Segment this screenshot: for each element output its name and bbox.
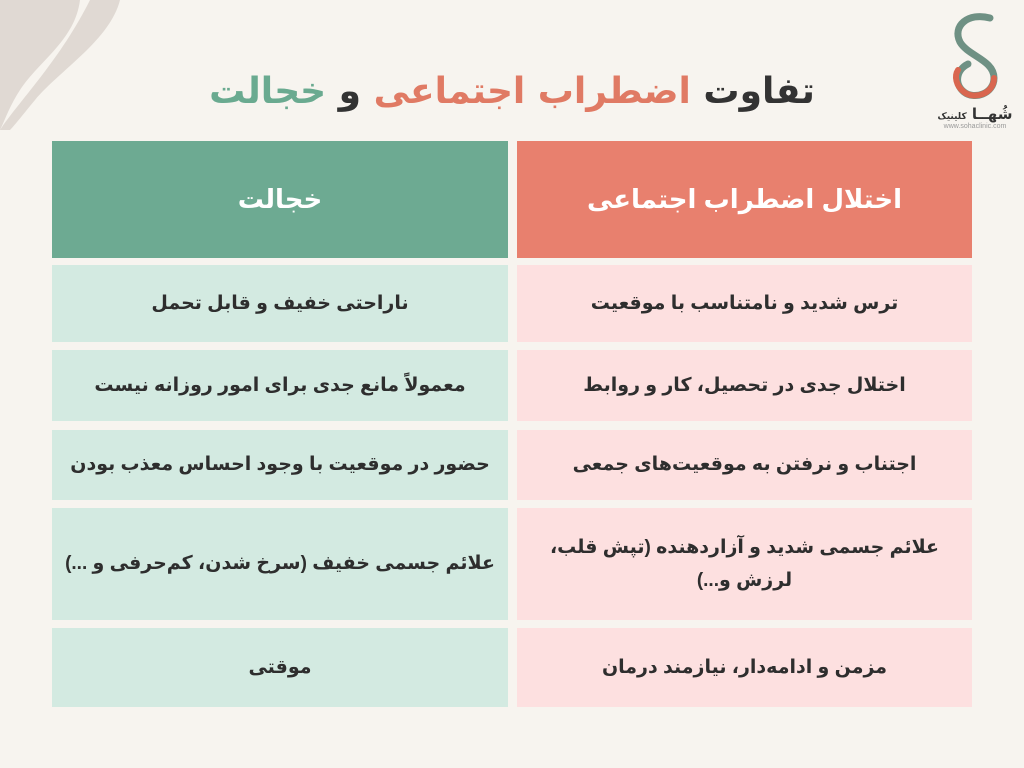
logo	[938, 13, 1012, 130]
header: social anxiety: اختلال اضطراب اجتماعی	[587, 184, 902, 214]
header: shyness	[52, 141, 508, 258]
text: ناراحتی خفیف و قابل تحمل	[151, 293, 409, 314]
decoration: top-left swoosh	[0, 0, 120, 130]
row 5: مزمن و ادامه‌دار، نیازمند درمان	[602, 657, 887, 678]
row 4: علائم جسمی شدید و آزاردهنده (تپش قلب، لرزش و...)	[550, 537, 939, 591]
text: معمولاً مانع جدی برای امور روزانه نیست	[94, 375, 466, 396]
logo: شُهــا کلینیک	[938, 105, 1012, 123]
text: علائم جسمی خفیف (سرخ شدن، کم‌حرفی و ...)	[65, 553, 495, 574]
row 3	[517, 430, 972, 500]
row 1	[517, 265, 972, 342]
logo: www.sohaclinic.com	[944, 123, 1006, 130]
title: تفاوت اضطراب اجتماعی و خجالت	[209, 71, 815, 112]
text: موقتی	[248, 657, 312, 678]
text: حضور در موقعیت با وجود احساس معذب بودن	[70, 454, 490, 475]
row 2	[517, 350, 972, 421]
row 1: ترس شدید و نامتناسب با موقعیت	[591, 293, 898, 314]
row 2: اختلال جدی در تحصیل، کار و روابط	[583, 375, 906, 396]
row 3: اجتناب و نرفتن به موقعیت‌های جمعی	[573, 454, 916, 475]
row 5	[517, 628, 972, 707]
header: social anxiety	[517, 141, 972, 258]
row 4	[517, 508, 972, 620]
header: shyness: خجالت	[238, 184, 322, 214]
